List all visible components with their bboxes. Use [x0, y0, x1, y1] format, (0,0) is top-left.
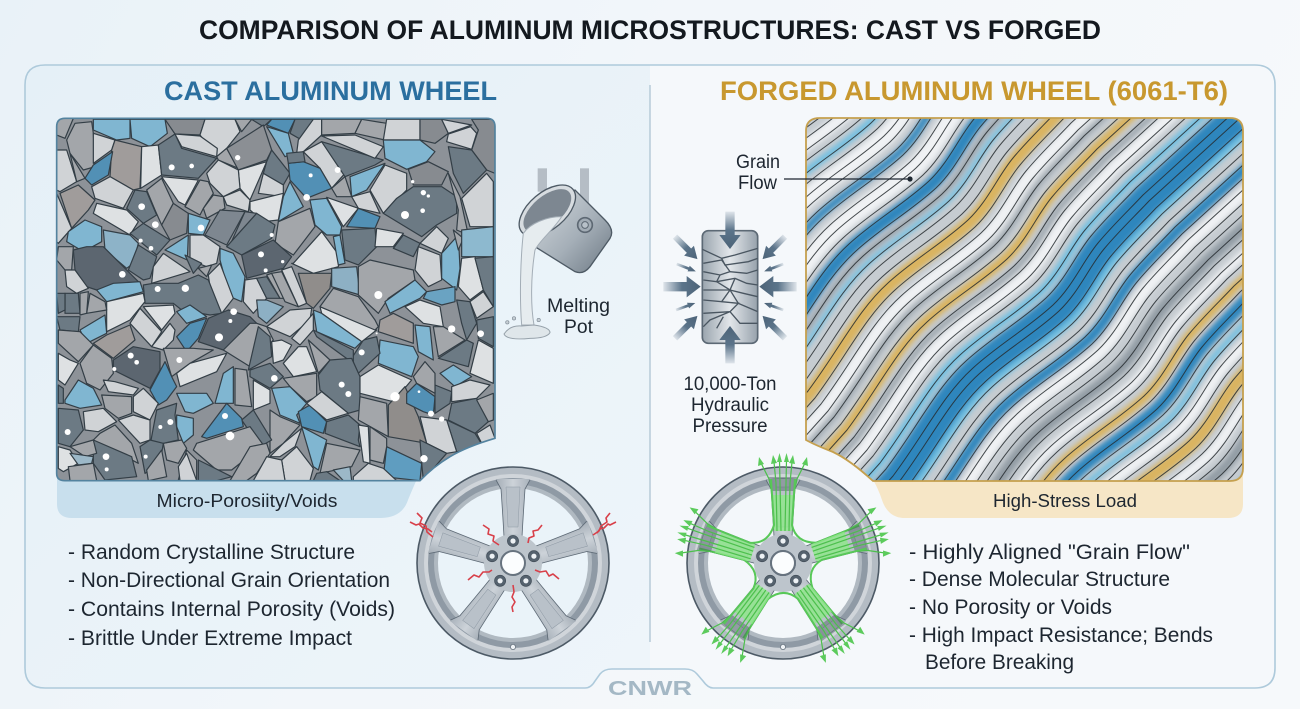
icon: forged wheel with green load paths [657, 453, 911, 697]
label: hydraulic pressure: Hydraulic [691, 395, 769, 416]
caption band: high-stress load [860, 470, 1243, 518]
text block: forged properties: Before Breaking [925, 651, 1074, 674]
icon: cast wheel with red cracks [410, 467, 616, 659]
label: hydraulic pressure: Pressure [692, 416, 768, 437]
heading: forged aluminum wheel: FORGED ALUMINUM WHEEL (6061-T6) [720, 76, 1228, 106]
heading: cast aluminum wheel: CAST ALUMINUM WHEEL [164, 76, 497, 106]
text block: forged properties: - Highly Aligned "Grain Flow" [909, 541, 1190, 564]
text block: forged properties [909, 541, 1213, 674]
text block: forged properties: - Dense Molecular Structure [909, 568, 1170, 591]
caption band: micro-porosity [57, 470, 421, 518]
label: hydraulic pressure: 10,000-Ton [684, 374, 776, 395]
title: COMPARISON OF ALUMINUM MICROSTRUCTURES: CAST VS FORGED [199, 15, 1101, 45]
caption band: high-stress load: High-Stress Load [993, 491, 1137, 511]
text block: cast properties: - Brittle Under Extreme Impact [68, 627, 352, 650]
logo: CNWR: CNWR [608, 678, 693, 700]
panel: cast random grain mosaic [55, 117, 497, 483]
callout: grain flow: Grain [736, 152, 780, 173]
text block: forged properties: - High Impact Resistance; Bends [909, 624, 1213, 647]
panel: forged grain flow texture [805, 117, 1244, 482]
icon: hydraulic press billet with arrows [663, 212, 797, 363]
label: melting pot [547, 296, 610, 338]
white micro-porosity voids [65, 155, 484, 471]
callout: grain flow [736, 152, 913, 194]
text block: cast properties: - Random Crystalline Structure [68, 541, 355, 564]
icon: melting pot pouring metal [504, 168, 612, 339]
text block: cast properties: - Non-Directional Grain Orientation [68, 569, 390, 592]
callout: grain flow: Flow [738, 173, 777, 194]
text block: cast properties: - Contains Internal Porosity (Voids) [68, 598, 395, 621]
label: melting pot: Melting [547, 296, 610, 317]
text block: forged properties: - No Porosity or Voids [909, 596, 1112, 619]
text block: cast properties [68, 541, 395, 650]
label: hydraulic pressure [684, 374, 776, 437]
label: melting pot: Pot [564, 317, 594, 338]
caption band: micro-porosity: Micro-Porosiity/Voids [156, 491, 338, 511]
